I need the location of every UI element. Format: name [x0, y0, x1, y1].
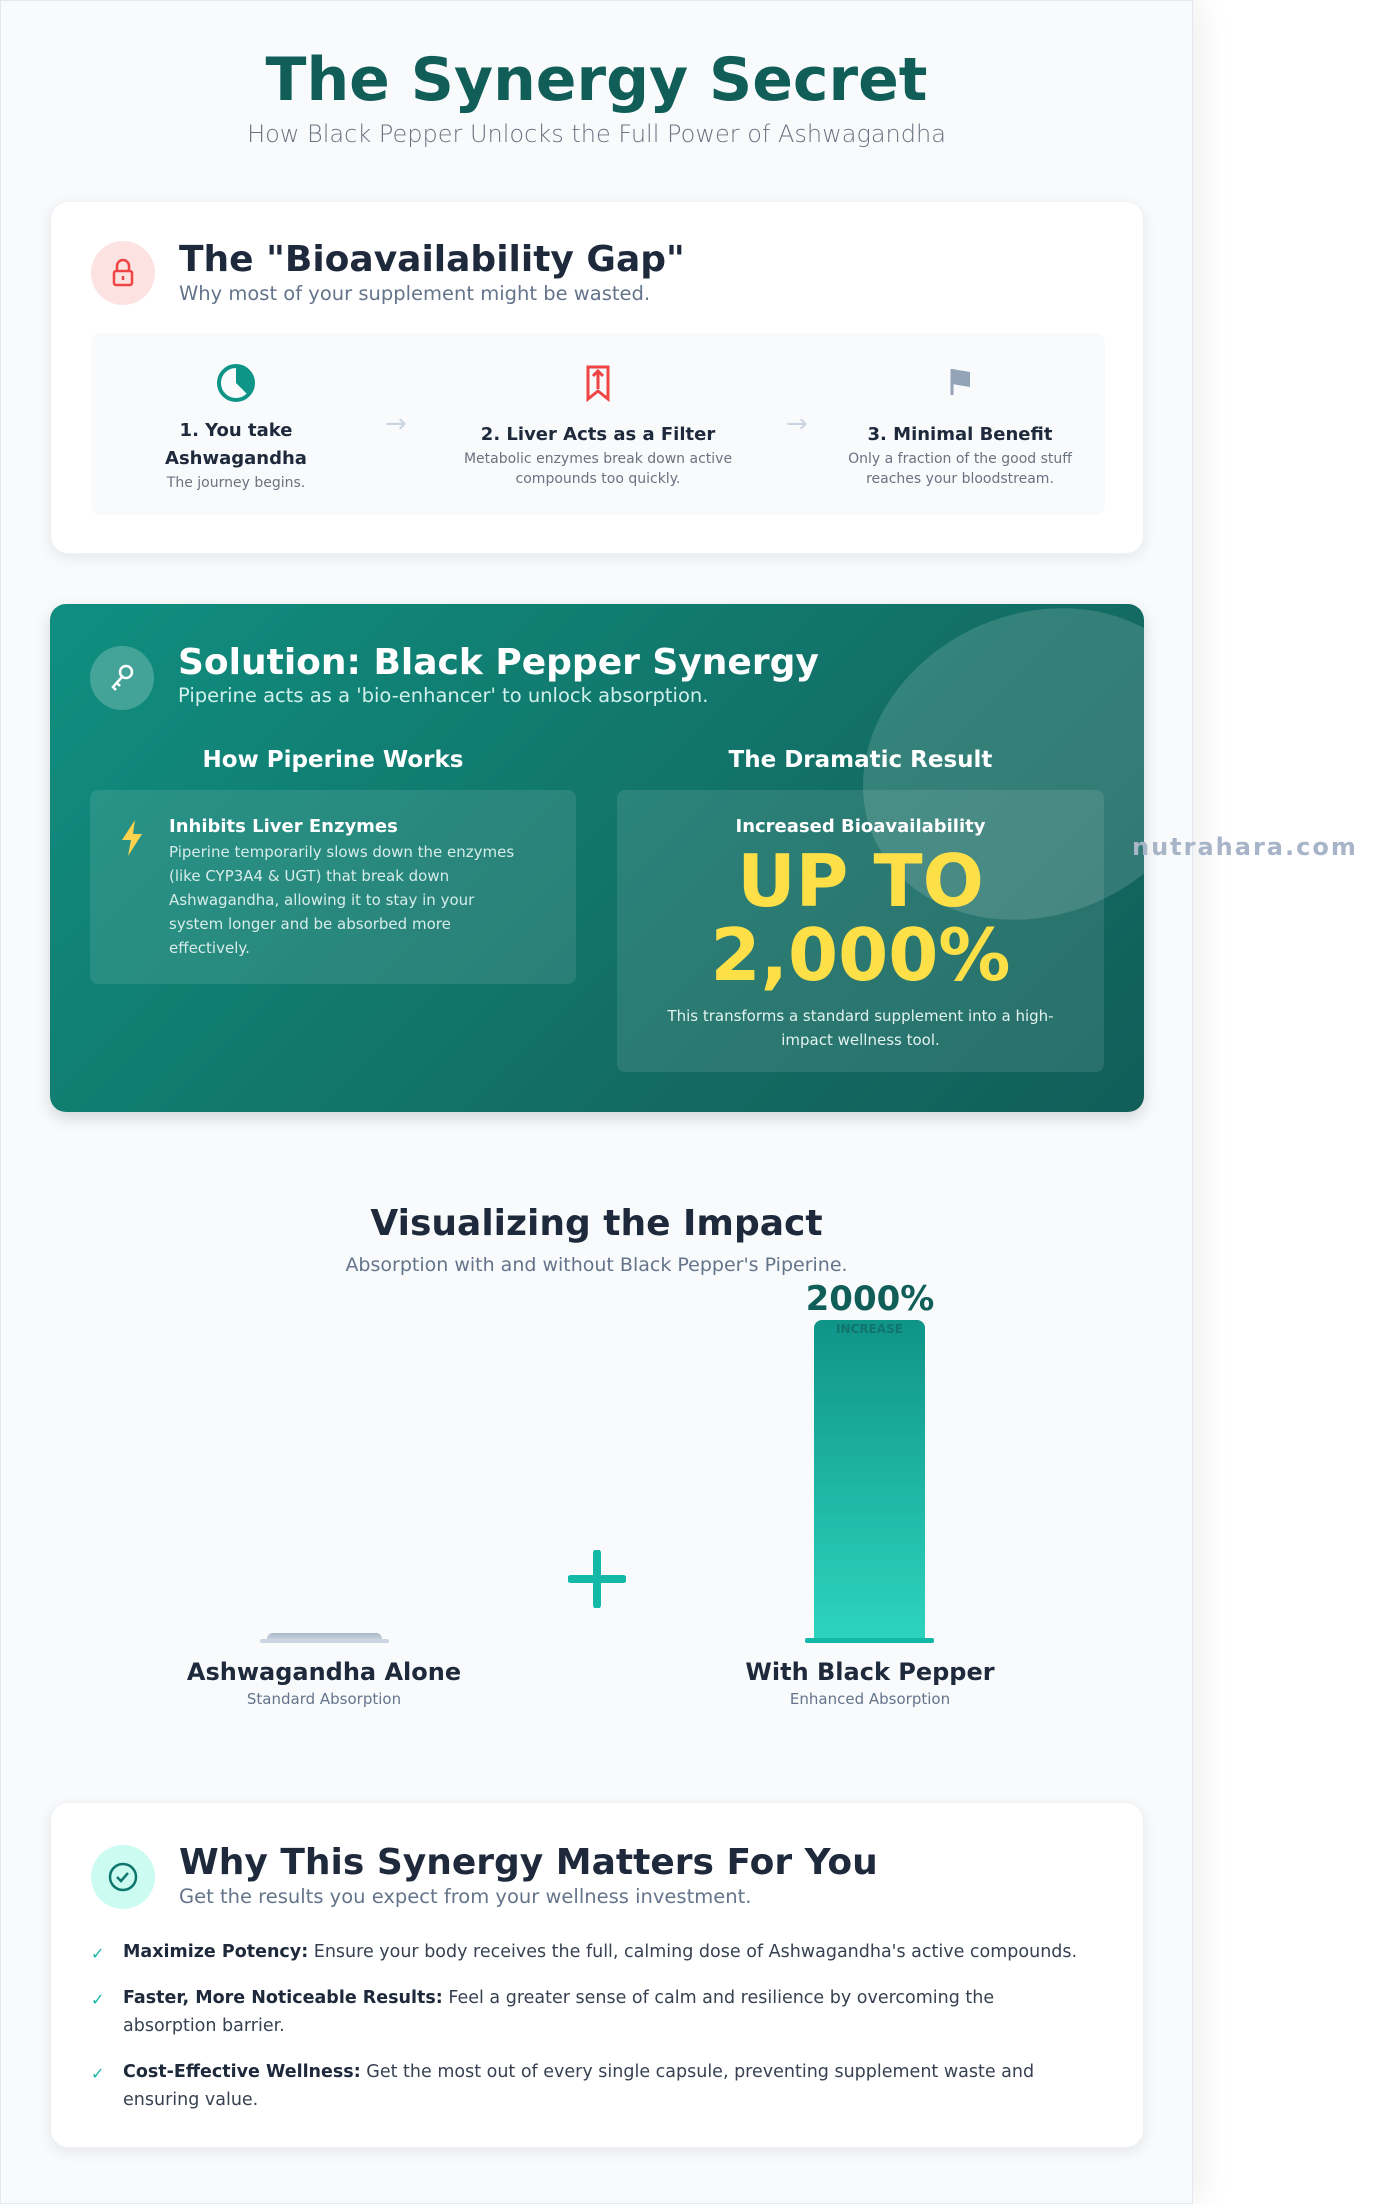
item 1: Maximize Potency: Ensure your body receives the full, calming dose of Ashwagandha's active compounds.: [123, 1942, 1077, 1962]
subheading: Piperine acts as a 'bio-enhancer' to unlock absorption.: [178, 684, 708, 707]
item 1: ✓: [91, 1944, 104, 1963]
step 2: 2. Liver Acts as a Filter: [481, 424, 715, 445]
step 2: Metabolic enzymes break down active: [464, 451, 732, 467]
box: inhibits liver enzymes: Inhibits Liver Enzymes: [169, 816, 398, 837]
section heading: visualizing: Visualizing the Impact: [370, 1203, 823, 1244]
steps box: [91, 333, 1105, 515]
panel: solution: [50, 604, 1144, 1112]
benefit list: [91, 1942, 1077, 2110]
icon: flag: [950, 369, 970, 395]
value label: 2000%: [806, 1279, 934, 1319]
bar chart: Enhanced Absorption: [790, 1690, 950, 1708]
step 1: Ashwagandha: [165, 448, 307, 469]
icon: pie: [217, 364, 255, 402]
step 1: [165, 364, 307, 491]
step 2: [464, 366, 732, 487]
label pepper: With Black Pepper: [745, 1658, 995, 1686]
section subtitle: Absorption with and without Black Pepper's Piperine.: [345, 1254, 848, 1276]
subheading: Why most of your supplement might be wasted.: [179, 282, 650, 305]
title: The Synergy Secret: [266, 45, 927, 115]
heading: The "Bioavailability Gap": [179, 239, 685, 280]
box: dramatic result: [617, 790, 1104, 1072]
box: dramatic result: This transforms a standard supplement into a high-impact wellness tool.: [667, 1007, 1054, 1049]
icon: key: [90, 646, 154, 710]
icon: check circle: [91, 1845, 155, 1909]
bar chart: Standard Absorption: [247, 1690, 401, 1708]
panel: why it matters: [50, 1802, 1144, 2148]
column heading right: The Dramatic Result: [729, 747, 992, 773]
icon: lightning: [122, 820, 142, 856]
plus icon: [568, 1550, 626, 1608]
box: inhibits liver enzymes: Piperine temporarily slows down the enzymes (like CYP3A4 & UGT) that break down Ashwagandha, allowing it to stay in your system longer and be absorbed more effectively.: [169, 843, 514, 957]
subheading: Get the results you expect from your wellness investment.: [179, 1885, 751, 1908]
watermark: nutrahara.com: [1132, 833, 1358, 861]
box: inhibits liver enzymes: [90, 790, 576, 984]
big number: [711, 839, 1010, 997]
step 2: compounds too quickly.: [516, 471, 680, 487]
icon: lock: [91, 241, 155, 305]
step 3: Only a fraction of the good stuff: [848, 451, 1072, 467]
panel: bioavailability gap: [50, 201, 1144, 554]
step 3: [848, 369, 1072, 487]
item 2: ✓: [91, 1990, 104, 2009]
big number: UP TO: [737, 839, 984, 923]
subtitle: How Black Pepper Unlocks the Full Power of Ashwagandha: [247, 120, 946, 148]
bar chart: INCREASE: [836, 1322, 903, 1336]
big number: 2,000%: [711, 913, 1010, 997]
label alone: Ashwagandha Alone: [187, 1658, 461, 1686]
heading: Solution: Black Pepper Synergy: [178, 642, 819, 683]
box: dramatic result: Increased Bioavailability: [736, 816, 986, 837]
item 3: ✓: [91, 2064, 104, 2083]
icon: filter bookmark: [586, 366, 610, 402]
item 2: Faster, More Noticeable Results: Feel a greater sense of calm and resilience by overcoming the absorption barrier.: [123, 1988, 994, 2036]
step 3: reaches your bloodstream.: [866, 471, 1054, 487]
bar: alone: [267, 1633, 382, 1640]
step 3: 3. Minimal Benefit: [868, 424, 1052, 445]
item 3: Cost-Effective Wellness: Get the most out of every single capsule, preventing supplement waste and ensuring value.: [123, 2062, 1034, 2110]
bar chart: [187, 1279, 995, 1708]
step 1: 1. You take: [180, 420, 292, 441]
heading: Why This Synergy Matters For You: [179, 1842, 878, 1883]
bar: with pepper: [814, 1320, 925, 1640]
column heading left: How Piperine Works: [202, 747, 464, 773]
step 1: The journey begins.: [167, 475, 305, 491]
arrow: →: [786, 409, 808, 439]
arrow: →: [385, 409, 407, 439]
